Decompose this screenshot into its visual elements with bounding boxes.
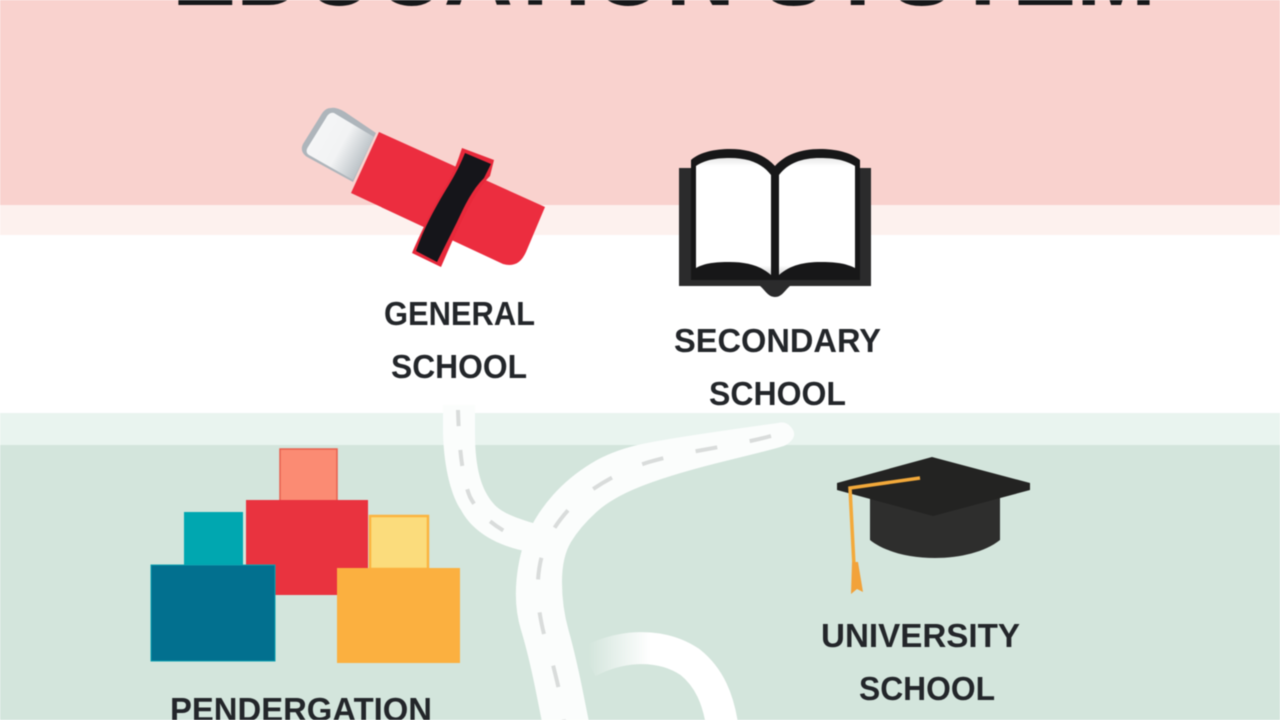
- book left page: [696, 158, 771, 275]
- icon: graduation cap: [837, 457, 1030, 594]
- block: dark teal: [151, 565, 275, 661]
- road: from general school: [443, 405, 540, 552]
- icon: toy blocks: [151, 449, 460, 663]
- icon: open book: [679, 149, 871, 297]
- scroll red body: [351, 132, 545, 265]
- road centre dashes: secondary school: [538, 436, 771, 720]
- block: light yellow: [370, 516, 428, 569]
- scroll paper end: [302, 108, 376, 182]
- block: salmon top: [280, 449, 337, 501]
- label: university school: UNIVERSITY: [821, 617, 1020, 654]
- book back cover: [679, 168, 871, 297]
- road centre dashes: general school: [458, 410, 506, 532]
- block: teal small: [184, 512, 243, 566]
- road: from secondary school: [516, 422, 794, 720]
- label: general school: [384, 295, 535, 385]
- label: secondary school: SECONDARY: [674, 322, 881, 359]
- road network: [443, 405, 794, 720]
- label: secondary school: [674, 322, 881, 412]
- book black arches: [691, 149, 860, 280]
- road: lower arc: [588, 648, 722, 720]
- block: orange: [337, 568, 460, 663]
- cap tassel end: [851, 562, 863, 594]
- cap body: [870, 490, 1000, 558]
- label: university school: [821, 617, 1020, 707]
- label: secondary school: SCHOOL: [709, 375, 846, 412]
- cap tassel cord: [850, 478, 920, 566]
- block: red centre: [246, 500, 368, 595]
- label: general school: GENERAL: [384, 295, 535, 332]
- icon: diploma scroll: [302, 108, 545, 267]
- book right page: [779, 158, 855, 275]
- label: university school: SCHOOL: [859, 670, 995, 707]
- cap board: [837, 457, 1030, 516]
- label: general school: SCHOOL: [391, 348, 527, 385]
- scroll ribbon: [412, 148, 494, 267]
